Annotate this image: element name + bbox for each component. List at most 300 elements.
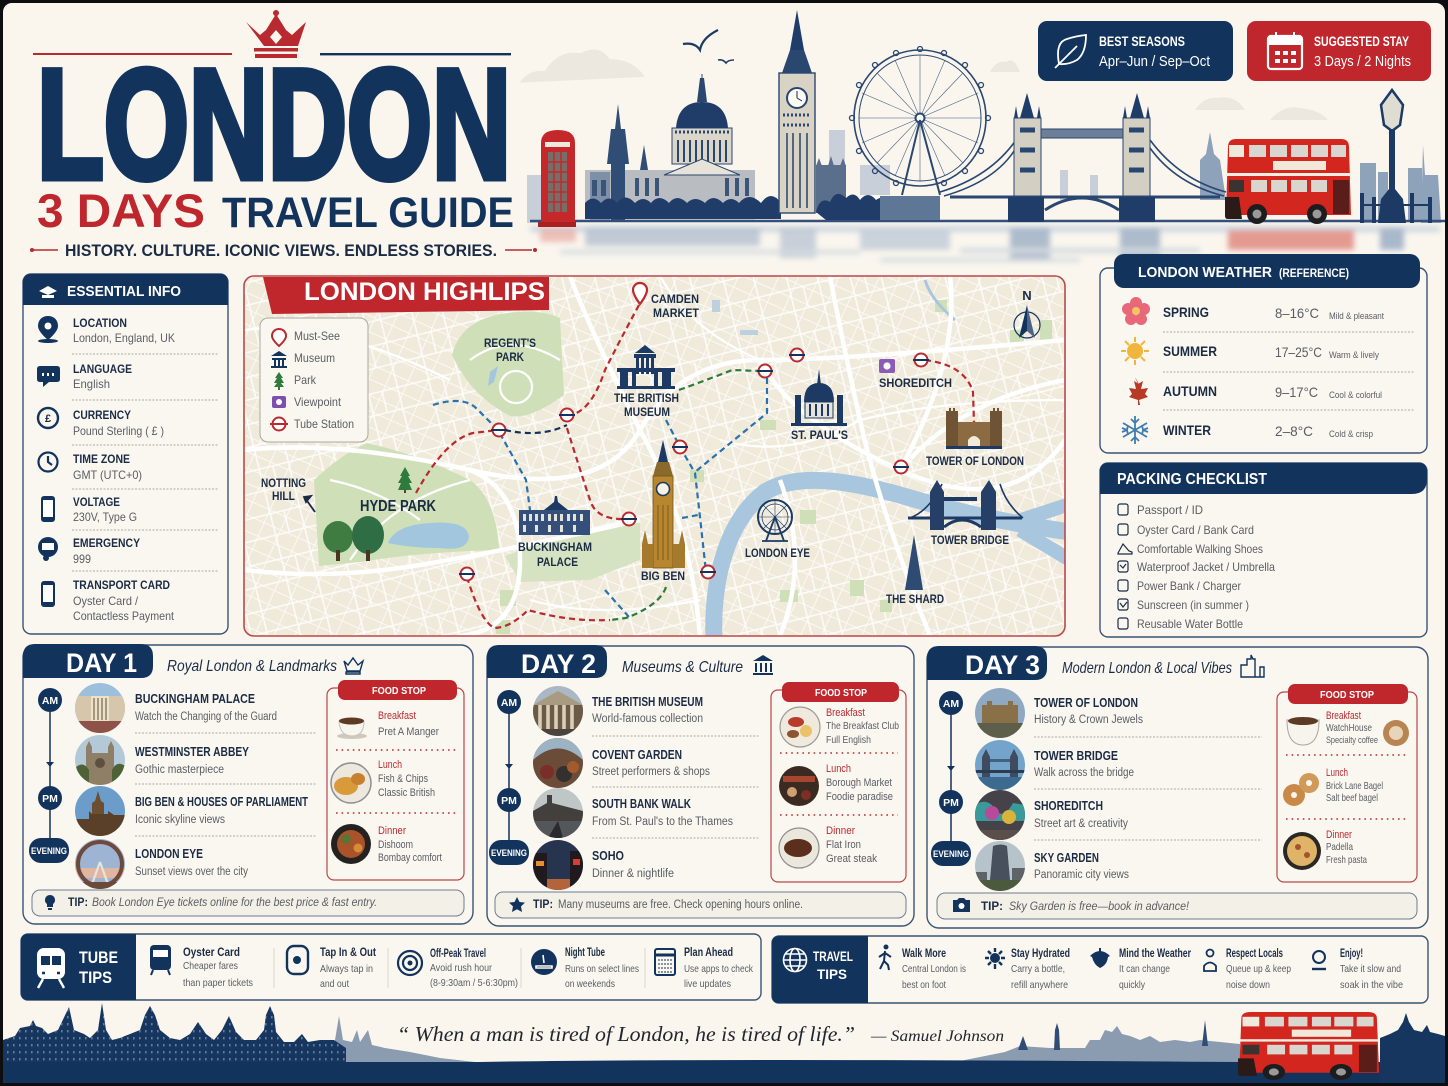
food stop box: Brick Lane Bagel: [1326, 780, 1383, 792]
palace of westminster style building: [585, 104, 781, 220]
activity text: WESTMINSTER ABBEY: [135, 745, 250, 759]
text: time zone: TIME ZONE: [73, 452, 130, 466]
landmark: shoreditch camera: [879, 359, 895, 373]
big ben: [779, 10, 846, 213]
title: LONDON: LONDON: [37, 38, 511, 212]
info rows: [37, 316, 218, 623]
food stop box: The Breakfast Club: [826, 720, 899, 732]
food: borough market: [779, 766, 819, 806]
timeline: EVENING: [31, 846, 67, 857]
text: currency: Pound Sterling ( £ ): [73, 424, 164, 438]
panel: day 3: [927, 646, 1428, 928]
timeline: EVENING: [933, 849, 969, 860]
row: summer: [1163, 343, 1379, 361]
panel: travel tips: [772, 936, 1428, 1003]
icon: museum: [753, 655, 773, 675]
checklist items: [1137, 503, 1275, 631]
food: fish and chips: [331, 763, 371, 803]
icon: speech bubble: [37, 366, 60, 387]
badge: best seasons: BEST SEASONS: [1099, 34, 1185, 49]
icon: transport card: [41, 581, 55, 607]
row: spring: 8–16°C: [1275, 305, 1319, 321]
subtitle: 3 days travel guide: TRAVEL GUIDE: [222, 189, 514, 237]
row: winter: WINTER: [1163, 422, 1211, 438]
heading: essential info: ESSENTIAL INFO: [67, 283, 181, 300]
activity text: Walk across the bridge: [1034, 767, 1134, 779]
timeline: AM: [501, 697, 517, 709]
tip: walk more: [879, 944, 966, 991]
checklist items: Reusable Water Bottle: [1137, 617, 1243, 631]
tip: respect locals: noise down: [1226, 979, 1270, 991]
tagline: HISTORY. CULTURE. ICONIC VIEWS. ENDLESS STORIES.: [65, 241, 497, 260]
activity text: BIG BEN & HOUSES OF PARLIAMENT: [135, 795, 308, 809]
heading: packing: [1100, 463, 1427, 494]
ground line: [530, 220, 1445, 222]
route: green dashed lines: [610, 370, 760, 620]
badge: suggested stay: SUGGESTED STAY: [1314, 34, 1409, 49]
checklist items: Oyster Card / Bank Card: [1137, 523, 1254, 537]
food stop box: Flat Iron: [826, 839, 861, 851]
photo: tower bridge: [975, 740, 1025, 790]
activity text: Watch the Changing of the Guard: [135, 711, 277, 723]
map labels: MUSEUM: [624, 407, 670, 419]
tip: day 3: Sky Garden is free—book in advance!: [1009, 901, 1190, 913]
heading: weather: LONDON WEATHER: [1138, 264, 1272, 281]
text: transport card: TRANSPORT CARD: [73, 578, 170, 592]
icon: spring flower: [1122, 297, 1150, 325]
timeline: PM: [42, 793, 58, 805]
subtitle: museums: Museums & Culture: [622, 659, 743, 676]
skyline illustration: [519, 10, 1445, 262]
header title block: [30, 10, 537, 260]
tip: stay hydrated: Carry a bottle,: [1011, 963, 1065, 975]
icon: phone: [41, 496, 55, 522]
panel: tube tips: [21, 934, 761, 1000]
food stop box: Lunch: [378, 759, 402, 771]
activity text: [592, 695, 760, 880]
food stop box: Salt beef bagel: [1326, 793, 1378, 804]
row: winter: 2–8°C: [1275, 423, 1313, 439]
heading: packing: PACKING CHECKLIST: [1117, 471, 1267, 488]
row: autumn: Cool & colorful: [1329, 390, 1382, 401]
checklist items: Comfortable Walking Shoes: [1137, 542, 1263, 556]
heading: travel tips: TIPS: [817, 966, 847, 982]
heading: travel tips: TRAVEL: [813, 948, 853, 964]
text: voltage: 230V, Type G: [73, 510, 137, 524]
tip: enjoy: [1312, 948, 1403, 991]
map legend: [260, 318, 368, 442]
food stop box: Fish & Chips: [378, 773, 428, 785]
activity text: [1034, 696, 1262, 881]
map legend: Museum: [294, 351, 335, 365]
tip: enjoy: Take it slow and: [1340, 963, 1401, 975]
activity text: Dinner & nightlife: [592, 868, 674, 880]
heading: essential info: [23, 274, 228, 305]
photo: sky garden: [975, 841, 1025, 891]
dark skyline left: [3, 1003, 346, 1083]
tip: off-peak: (8-9:30am / 5-6:30pm): [430, 978, 518, 989]
photo: british museum: [533, 686, 583, 736]
tip: oyster card: than paper tickets: [183, 977, 253, 989]
map labels: NOTTING: [261, 478, 306, 490]
heading: day 3: [927, 646, 1047, 680]
activity text: LONDON EYE: [135, 847, 203, 861]
tip: day 1: [32, 890, 464, 916]
checklist items: Power Bank / Charger: [1137, 579, 1241, 593]
landmark: london eye: [758, 500, 792, 541]
text: language: LANGUAGE: [73, 362, 132, 376]
tip: day 2: [495, 892, 906, 918]
tip: respect locals: Queue up & keep: [1226, 963, 1291, 975]
map labels: REGENT'S: [484, 338, 536, 350]
photo: south bank: [533, 788, 583, 838]
icon: currency: £: [45, 413, 51, 425]
activity text: BUCKINGHAM PALACE: [135, 692, 255, 706]
map legend: Must-See: [294, 329, 340, 343]
activity text: TOWER OF LONDON: [1034, 696, 1138, 710]
activity text: World-famous collection: [592, 713, 703, 725]
route: navy dashed link: [505, 425, 567, 433]
checklist icons: [1118, 504, 1132, 629]
subtitle: modern london: Modern London & Local Vibes: [1062, 660, 1232, 677]
food stop box: Dinner: [826, 825, 855, 837]
timeline: [489, 690, 529, 865]
distant grey skyline left and right: [335, 1016, 1240, 1063]
food stop box: Breakfast: [826, 707, 865, 719]
map legend: Park: [294, 373, 317, 387]
row: autumn: [1163, 383, 1382, 401]
activity text: COVENT GARDEN: [592, 748, 682, 762]
food: flat iron steak: [779, 828, 819, 868]
icon: clock: [38, 452, 58, 472]
landmark: st pauls: [791, 369, 847, 426]
photo: covent garden: [533, 738, 583, 788]
tip: walk more: Central London is: [902, 963, 966, 975]
activity text: Gothic masterpiece: [135, 764, 224, 776]
heading: day 1: [23, 644, 153, 678]
food stop box: Breakfast: [378, 710, 416, 722]
food stop box: Borough Market: [826, 777, 892, 789]
quote: “ When a man is tired of London, he is tired of life.”: [397, 1022, 855, 1046]
map labels: TOWER OF LONDON: [926, 456, 1024, 468]
tip: enjoy: Enjoy!: [1340, 948, 1363, 960]
panel: essential info: [23, 274, 228, 634]
icon: summer sun: [1121, 337, 1149, 365]
icon: calendar: [1268, 32, 1302, 69]
text: voltage: VOLTAGE: [73, 495, 120, 509]
food stop box: FOOD STOP: [815, 687, 867, 699]
activity text: SOHO: [592, 849, 624, 863]
checklist items: Waterproof Jacket / Umbrella: [1137, 560, 1275, 574]
map labels: THE BRITISH: [614, 393, 679, 405]
checklist items: Sunscreen (in summer ): [1137, 598, 1249, 612]
activity text: SHOREDITCH: [1034, 799, 1103, 813]
double decker bus: [1225, 139, 1351, 224]
activity text: Iconic skyline views: [135, 814, 225, 826]
icon: crown: [344, 658, 363, 674]
photo: soho: [533, 840, 583, 890]
map labels: HILL: [272, 491, 295, 503]
map title banner: LONDON HIGHLIPS: [304, 278, 545, 306]
tip: stay hydrated: Stay Hydrated: [1011, 948, 1070, 960]
tip: night tube: Runs on select lines: [565, 963, 639, 975]
tip: plan ahead: Plan Ahead: [684, 945, 733, 959]
heading: tube tips: TUBE: [79, 948, 118, 967]
tip: tap in: [287, 945, 376, 990]
tip: off-peak: Avoid rush hour: [430, 962, 492, 974]
text: location: London, England, UK: [73, 331, 175, 345]
food stop box: Specialty coffee: [1326, 735, 1378, 746]
row: spring: Mild & pleasant: [1329, 311, 1384, 322]
tip: oyster card: Cheaper fares: [183, 960, 238, 972]
photo: westminster abbey: [75, 735, 125, 785]
food stop box: Bombay comfort: [378, 852, 442, 864]
row: winter: [1163, 422, 1373, 440]
tip: mind the weather: It can change: [1119, 963, 1170, 975]
photo: buckingham palace: [75, 683, 125, 733]
map labels: TOWER BRIDGE: [931, 535, 1009, 547]
tip: plan ahead: live updates: [684, 978, 731, 990]
lit windows left: [3, 1003, 346, 1083]
tip: night tube: Night Tube: [565, 945, 605, 959]
badge: suggested stay: 3 Days / 2 Nights: [1314, 54, 1411, 70]
row: autumn: AUTUMN: [1163, 383, 1217, 399]
tip: plan ahead: [655, 945, 754, 990]
map labels: PALACE: [537, 557, 578, 569]
landmark: tower of london: [946, 408, 1002, 449]
tip: mind the weather: quickly: [1119, 979, 1146, 991]
food stop box: Full English: [826, 734, 871, 746]
map: london highlights: [244, 276, 1070, 640]
clouds and faint distant city: [519, 50, 1328, 120]
heading: tube tips: [21, 934, 136, 1000]
activity text: Street performers & shops: [592, 766, 710, 778]
activity text: SOUTH BANK WALK: [592, 797, 691, 811]
landmark: british museum: [617, 345, 675, 389]
tip: walk more: best on foot: [902, 979, 946, 991]
map labels: HYDE PARK: [360, 498, 437, 515]
text: language: English: [73, 377, 110, 391]
red phone box: [538, 130, 576, 227]
activity text: Panoramic city views: [1034, 869, 1129, 881]
tip: plan ahead: Use apps to check: [684, 963, 754, 975]
subtitle: royal london: Royal London & Landmarks: [167, 658, 337, 675]
row: summer: Warm & lively: [1329, 350, 1379, 361]
badge: suggested stay: [1247, 21, 1431, 81]
tip: mind the weather: [1090, 948, 1191, 991]
food: pasta: [1283, 832, 1321, 870]
panel: day 2: [487, 645, 914, 926]
text: emergency: [73, 536, 140, 566]
st pauls cathedral: [664, 74, 740, 175]
tip: day 2: Many museums are free. Check opening hours online.: [558, 899, 803, 911]
heading: day 2: [487, 645, 607, 679]
subtitle: 3 days travel guide: [37, 184, 514, 237]
tip: respect locals: Respect Locals: [1226, 948, 1283, 960]
icon: autumn leaf: [1129, 377, 1148, 405]
text: transport card: Contactless Payment: [73, 609, 175, 623]
food stop box: Breakfast: [1326, 710, 1361, 722]
london eye: [850, 46, 990, 220]
row: summer: 17–25°C: [1275, 344, 1322, 360]
food stop box: Fresh pasta: [1326, 854, 1367, 866]
timeline: [931, 691, 971, 866]
text: currency: [73, 408, 164, 438]
food stop box: Dinner: [378, 825, 406, 837]
tube station markers: [459, 348, 929, 580]
birds: [683, 30, 734, 63]
text: voltage: [73, 495, 137, 524]
badge: best seasons: Apr–Jun / Sep–Oct: [1099, 54, 1210, 70]
crown icon: [246, 10, 306, 58]
timeline: PM: [943, 797, 959, 809]
food: bagels: [1283, 773, 1319, 806]
photo: big ben: [75, 786, 125, 836]
row: summer: SUMMER: [1163, 343, 1217, 359]
tip: oyster card: Oyster Card: [183, 945, 240, 959]
food: full english: [780, 707, 820, 747]
text: time zone: GMT (UTC+0): [73, 468, 142, 482]
food stop box: [771, 682, 906, 882]
map labels: CAMDEN: [651, 294, 699, 306]
activity text: SKY GARDEN: [1034, 851, 1099, 865]
photo: tower of london: [975, 688, 1025, 738]
food stop box: Pret A Manger: [378, 726, 439, 738]
food stop box: FOOD STOP: [372, 685, 426, 697]
tip: off-peak: [398, 946, 518, 989]
heading: weather: (REFERENCE): [1279, 266, 1349, 280]
map labels: BIG BEN: [641, 571, 685, 583]
map labels: BUCKINGHAM: [518, 542, 592, 554]
activity text: Sunset views over the city: [135, 866, 248, 878]
badge: best seasons: [1038, 21, 1233, 81]
heading: day 3: DAY 3: [965, 650, 1040, 680]
text: transport card: Oyster Card /: [73, 594, 139, 608]
tip: day 3: TIP:: [981, 899, 1003, 913]
text: time zone: [73, 452, 142, 482]
heading: travel tips: [772, 936, 868, 1003]
food stop box: Lunch: [1326, 767, 1348, 779]
food stop box: Padella: [1326, 841, 1353, 853]
subtitle: 3 days travel guide: 3 DAYS: [37, 184, 205, 237]
activity text: TOWER BRIDGE: [1034, 749, 1118, 763]
food stop box: Lunch: [826, 763, 851, 775]
landmark: the shard: [905, 535, 923, 590]
activity text: Street art & creativity: [1034, 818, 1128, 830]
row: winter: Cold & crisp: [1329, 429, 1373, 440]
main roads: [244, 276, 1065, 636]
food: coffee cups: [1287, 717, 1409, 746]
tip: tap in: and out: [320, 978, 349, 990]
panel: london weather: [1100, 254, 1427, 453]
heading: tube tips: TIPS: [79, 968, 112, 987]
map labels: PARK: [496, 352, 525, 364]
map title banner: [263, 277, 549, 314]
heading: weather: [1114, 254, 1420, 288]
row: autumn: 9–17°C: [1275, 384, 1318, 400]
route: red dashed lines: [416, 305, 974, 628]
dark spires right: [1018, 1020, 1208, 1050]
photo: shoreditch: [975, 790, 1025, 840]
trees in hyde park: [323, 467, 412, 561]
food: coffee: [337, 718, 367, 739]
tip: night tube: on weekends: [565, 978, 615, 990]
activity text: [135, 692, 316, 878]
map legend: Viewpoint: [294, 395, 342, 409]
text: language: [73, 362, 132, 391]
compass: [1014, 288, 1040, 338]
checklist items: Passport / ID: [1137, 503, 1203, 517]
compass: N: [1022, 288, 1032, 303]
text: transport card: [73, 578, 175, 623]
tower bridge: [940, 93, 1226, 222]
tip: tap in: Tap In & Out: [320, 945, 376, 959]
icon: leaf: [1055, 35, 1086, 68]
quote: — Samuel Johnson: [870, 1028, 1004, 1045]
food stop box: FOOD STOP: [1320, 689, 1374, 701]
map labels: THE SHARD: [886, 594, 944, 606]
map labels: MARKET: [653, 308, 699, 320]
tip: day 2: TIP:: [533, 897, 553, 911]
heading: day 2: DAY 2: [521, 649, 596, 679]
camden pin: [633, 283, 647, 304]
tip: mind the weather: Mind the Weather: [1119, 948, 1191, 960]
heading: day 1: DAY 1: [66, 648, 137, 678]
map labels: SHOREDITCH: [879, 378, 952, 390]
tip: respect locals: [1204, 948, 1291, 991]
parks: [314, 300, 1052, 634]
river and lakes: [714, 280, 1070, 640]
landmark: big ben: [642, 440, 685, 568]
panel: day 1: [23, 644, 473, 924]
trees along the river: [816, 194, 902, 220]
activity text: From St. Paul's to the Thames: [592, 816, 733, 828]
icon: location pin: [38, 316, 58, 343]
row: spring: [1163, 304, 1384, 322]
row: spring: SPRING: [1163, 304, 1209, 320]
icon: city: [1241, 655, 1264, 677]
tip: day 1: TIP:: [68, 895, 88, 909]
route: blue dashed lines: [433, 378, 767, 617]
photo: london eye: [75, 839, 125, 889]
title rule lines: [33, 53, 511, 55]
timeline: AM: [42, 695, 58, 707]
footer skyline: [3, 1003, 1445, 1083]
tip: night tube: [531, 945, 639, 990]
text: location: LOCATION: [73, 316, 127, 330]
tip: day 1: Book London Eye tickets online for the best price & fast entry.: [92, 897, 377, 909]
tip: oyster card: [150, 945, 253, 989]
timeline: EVENING: [491, 848, 527, 859]
food stop box: Great steak: [826, 853, 877, 865]
panel: packing checklist: [1100, 463, 1427, 637]
text: emergency: EMERGENCY: [73, 536, 140, 550]
text: currency: CURRENCY: [73, 408, 131, 422]
activity text: THE BRITISH MUSEUM: [592, 695, 703, 709]
river reflection: [530, 226, 1440, 262]
dark ground band: [3, 1060, 1445, 1083]
dark skyline right: [1380, 1013, 1445, 1083]
tip: day 3: [937, 893, 1417, 919]
notting hill arrow: [304, 496, 315, 512]
map labels: ST. PAUL'S: [791, 430, 848, 442]
tip: walk more: Walk More: [902, 948, 946, 960]
text: location: [73, 316, 175, 345]
street lamp and railing: [1360, 90, 1432, 223]
food stop box: [327, 680, 464, 880]
icon: winter snowflake: [1122, 416, 1148, 444]
text: emergency: 999: [73, 552, 91, 566]
